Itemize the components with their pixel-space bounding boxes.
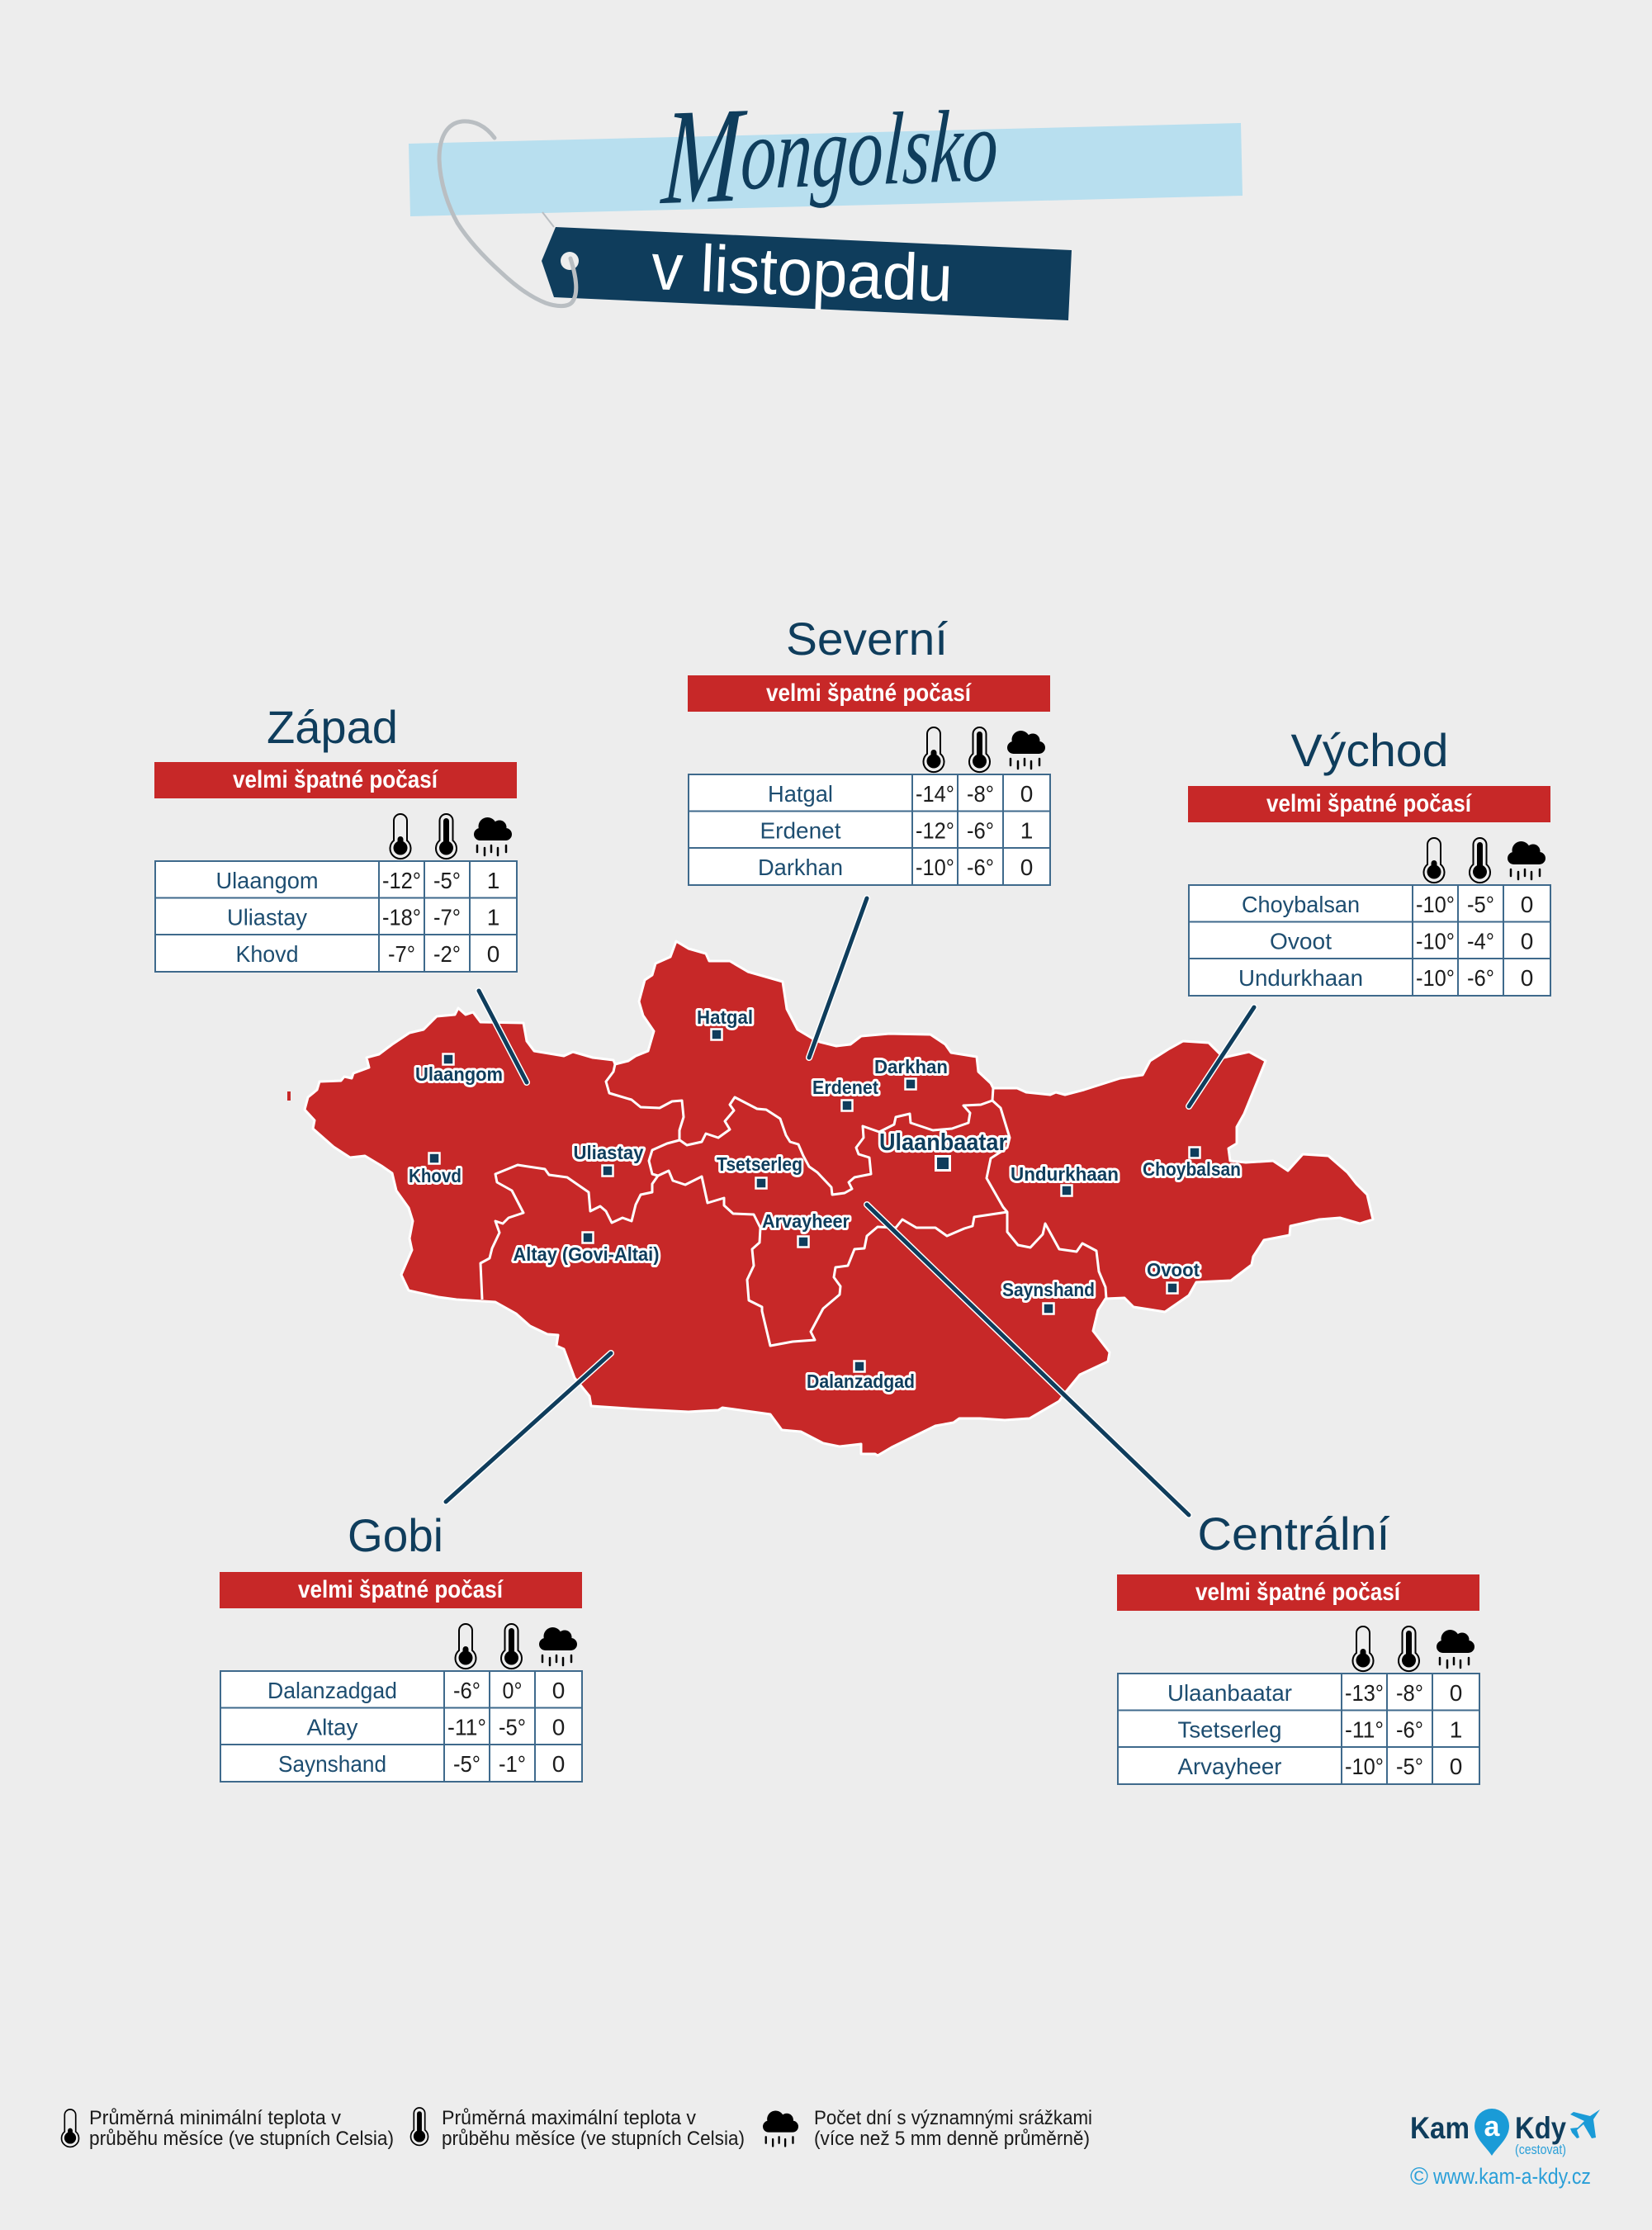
website: © <box>1410 2163 1428 2190</box>
icon: maximum temperature <box>1399 1626 1419 1671</box>
weather table: -7° <box>433 905 461 930</box>
weather table <box>220 1671 582 1782</box>
legend text: maximum temperature: průběhu měsíce (ve stupních Celsia) <box>442 2128 745 2150</box>
tag hole <box>561 252 579 270</box>
weather label: velmi špatné počasí <box>298 1576 504 1603</box>
weather bar <box>1188 786 1550 822</box>
weather table: 0 <box>1450 1754 1462 1779</box>
weather table: 0 <box>1020 781 1033 807</box>
weather table: 1 <box>487 868 499 893</box>
weather table: -8° <box>1396 1680 1423 1706</box>
weather table: -6° <box>967 855 994 880</box>
weather table: Darkhan <box>758 855 843 880</box>
thin tag string <box>542 212 554 227</box>
city: Choybalsan: Choybalsan <box>1143 1158 1241 1180</box>
logo word: Kam: Kam <box>1410 2111 1470 2145</box>
icon: maximum temperature <box>969 727 990 772</box>
website: www.kam-a-kdy.cz <box>1432 2164 1591 2189</box>
icon: rain cloud <box>539 1627 577 1665</box>
logo letter: a: a <box>1484 2111 1501 2142</box>
weather table <box>155 861 517 972</box>
logo word: Kdy: Kdy <box>1515 2111 1566 2145</box>
city: Erdenet: Erdenet <box>812 1077 878 1098</box>
icon: rain cloud <box>1007 731 1045 769</box>
legend text: maximum temperature <box>442 2107 745 2150</box>
weather table: Choybalsan <box>1242 892 1360 917</box>
weather table: 0 <box>487 941 499 967</box>
weather table: -10° <box>1416 892 1455 917</box>
legend icon: rain cloud <box>763 2110 798 2147</box>
weather table: -6° <box>453 1678 480 1703</box>
weather table: Uliastay <box>227 905 307 930</box>
icon: minimum temperature <box>1423 838 1445 883</box>
weather table: Altay <box>307 1714 358 1740</box>
weather table: Khovd <box>236 941 299 967</box>
heading: Centrální <box>1197 1508 1390 1560</box>
weather table: -12° <box>916 817 954 844</box>
connector line: Gobi <box>446 1353 611 1502</box>
weather table: Saynshand <box>278 1751 386 1777</box>
weather table: 1 <box>1020 817 1033 844</box>
panel: Východ <box>1188 724 1550 996</box>
weather table: -10° <box>916 855 954 880</box>
weather table: -12° <box>382 868 421 893</box>
city: Tsetserleg: Tsetserleg <box>717 1153 802 1175</box>
weather table: -6° <box>1467 965 1494 991</box>
legend <box>62 2107 1092 2150</box>
weather table: -11° <box>1345 1717 1384 1742</box>
weather table: Ovoot <box>1270 928 1332 954</box>
city: Uliastay <box>573 1142 644 1176</box>
icon: minimum temperature <box>390 814 411 859</box>
icon: rain cloud <box>1437 1630 1474 1668</box>
panel: Centrální <box>1117 1508 1479 1784</box>
heading: Gobi <box>348 1509 443 1561</box>
legend text: rain days: (více než 5 mm denně průměrně) <box>814 2128 1090 2150</box>
weather table: 0 <box>1521 965 1533 991</box>
weather table: 0 <box>1521 928 1533 954</box>
icon: maximum temperature <box>1470 838 1490 883</box>
icon: minimum temperature <box>456 1624 476 1669</box>
weather table: Hatgal <box>768 781 833 807</box>
weather table: -18° <box>382 905 421 930</box>
panel: Západ <box>154 701 517 972</box>
weather table: -6° <box>1396 1717 1423 1742</box>
legend text: minimum temperature: průběhu měsíce (ve stupních Celsia) <box>89 2128 394 2150</box>
weather bar <box>1117 1574 1479 1611</box>
weather table: -5° <box>499 1714 526 1740</box>
weather table: -13° <box>1345 1680 1384 1706</box>
title tag <box>542 227 1072 320</box>
legend icon: maximum temperature <box>411 2108 428 2145</box>
weather label: velmi špatné počasí <box>1195 1579 1401 1606</box>
icon: maximum temperature <box>436 814 457 859</box>
city: Erdenet <box>812 1077 878 1111</box>
city: Saynshand: Saynshand <box>1002 1279 1095 1300</box>
city: Dalanzadgad: Dalanzadgad <box>807 1371 915 1392</box>
weather table: -14° <box>916 781 954 807</box>
weather table: -10° <box>1416 928 1455 954</box>
weather table: 0 <box>1450 1680 1462 1706</box>
legend icon: minimum temperature <box>62 2109 78 2147</box>
weather table: -4° <box>1467 928 1494 954</box>
heading: Severní <box>786 613 948 665</box>
city: Darkhan <box>874 1056 948 1090</box>
weather table: -2° <box>433 941 461 967</box>
legend text: maximum temperature: Průměrná maximální teplota v <box>442 2107 696 2129</box>
weather table: -5° <box>1467 892 1494 917</box>
logo: Kam a Kdy <box>1410 2109 1600 2190</box>
weather table <box>1118 1674 1479 1784</box>
city: Saynshand <box>1002 1279 1095 1314</box>
tag ring <box>439 121 576 306</box>
city: Uliastay: Uliastay <box>573 1142 644 1163</box>
connector line: Východ <box>1189 1007 1254 1106</box>
weather table: -1° <box>499 1751 526 1777</box>
weather table: -11° <box>447 1714 486 1740</box>
weather bar <box>220 1572 582 1608</box>
weather table: 1 <box>487 905 499 930</box>
weather table: -10° <box>1416 965 1455 991</box>
city: Khovd: Khovd <box>409 1165 462 1186</box>
city: Arvayheer: Arvayheer <box>762 1210 850 1232</box>
weather table: Ulaangom <box>216 868 319 893</box>
icon: rain cloud <box>1508 841 1545 879</box>
weather table: -7° <box>388 941 415 967</box>
weather table: 0 <box>1521 892 1533 917</box>
weather table: 0 <box>552 1751 565 1777</box>
icon: airplane <box>1570 2109 1600 2138</box>
weather table: -5° <box>1396 1754 1423 1779</box>
heading: Západ <box>267 701 398 753</box>
city: Hatgal <box>697 1006 753 1040</box>
weather table: 0° <box>502 1678 522 1703</box>
city: Ovoot: Ovoot <box>1147 1259 1200 1281</box>
city: Undurkhaan: Undurkhaan <box>1011 1163 1119 1185</box>
city: Ulaangom <box>415 1053 503 1085</box>
city: Undurkhaan <box>1011 1163 1119 1195</box>
small western island <box>287 1091 291 1101</box>
weather bar <box>688 675 1050 712</box>
city: Altay: Altay (Govi-Altai) <box>514 1243 659 1265</box>
legend text: rain days <box>814 2107 1092 2150</box>
weather table: -5° <box>453 1751 480 1777</box>
title block <box>409 69 1243 320</box>
panel: Gobi <box>220 1509 582 1782</box>
weather table: 0 <box>1020 855 1033 880</box>
heading: Východ <box>1291 724 1448 776</box>
city: Choybalsan <box>1143 1148 1241 1180</box>
weather table: 0 <box>552 1714 565 1740</box>
weather table: -6° <box>967 817 994 844</box>
connector line: Západ <box>479 991 527 1082</box>
weather table: Dalanzadgad <box>267 1678 397 1703</box>
icon: rain cloud <box>474 817 512 855</box>
connector line: Centrální <box>867 1205 1189 1515</box>
weather label: velmi špatné počasí <box>766 679 972 707</box>
city: Tsetserleg <box>717 1153 802 1189</box>
city: Ulaanbaatar <box>879 1129 1007 1171</box>
icon: minimum temperature <box>923 727 944 772</box>
title: Mongolsko: M <box>658 78 750 233</box>
weather table: Ulaanbaatar <box>1167 1680 1292 1706</box>
city: Ovoot <box>1147 1259 1200 1293</box>
weather table: -8° <box>967 781 994 807</box>
icon: map pin <box>1474 2109 1509 2156</box>
country outline <box>305 941 1373 1456</box>
subtitle: v listopadu: v listopadu <box>650 230 954 315</box>
city: Hatgal: Hatgal <box>697 1006 753 1028</box>
weather table <box>689 774 1050 885</box>
weather table: -10° <box>1345 1754 1384 1779</box>
city markers and labels <box>409 1006 1241 1392</box>
weather label: velmi špatné počasí <box>1266 790 1472 817</box>
weather table: Erdenet <box>760 817 841 844</box>
weather label: velmi špatné počasí <box>233 766 438 793</box>
weather table: 0 <box>552 1678 565 1703</box>
website <box>1410 2163 1591 2190</box>
legend text: minimum temperature <box>89 2107 394 2150</box>
city: Arvayheer <box>762 1210 850 1247</box>
weather table: -5° <box>433 868 461 893</box>
map of Mongolia <box>287 941 1373 1456</box>
weather table: Tsetserleg <box>1177 1717 1281 1742</box>
weather bar <box>154 762 517 798</box>
legend text: rain days: Počet dní s významnými srážkami <box>814 2107 1092 2129</box>
weather table: Undurkhaan <box>1238 965 1363 991</box>
city: Darkhan: Darkhan <box>874 1056 948 1077</box>
connector line: Severní <box>809 898 867 1058</box>
city: Ulaanbaatar: Ulaanbaatar <box>879 1129 1007 1156</box>
weather table <box>1189 885 1550 996</box>
weather table: 1 <box>1450 1717 1462 1742</box>
panel: Severní <box>688 613 1050 885</box>
city: Altay <box>514 1232 659 1265</box>
city: Ulaangom: Ulaangom <box>415 1063 503 1085</box>
logo tagline: (cestovat) <box>1515 2142 1566 2157</box>
city: Dalanzadgad <box>807 1361 915 1392</box>
title band <box>409 123 1243 216</box>
city: Khovd <box>409 1153 462 1186</box>
title: Mongolsko: ongolsko <box>738 88 1001 212</box>
icon: minimum temperature <box>1352 1626 1374 1671</box>
icon: maximum temperature <box>501 1624 522 1669</box>
region borders <box>480 1064 1106 1346</box>
weather table: Arvayheer <box>1177 1754 1281 1779</box>
legend text: minimum temperature: Průměrná minimální teplota v <box>89 2107 341 2129</box>
